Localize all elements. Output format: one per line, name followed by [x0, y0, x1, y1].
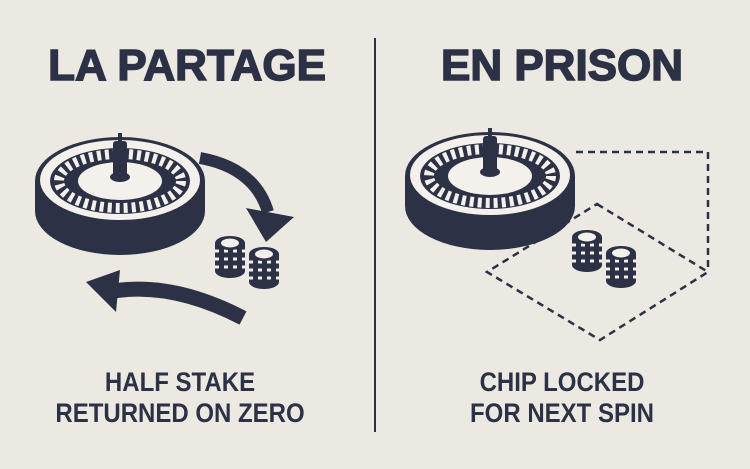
caption left: [55, 368, 305, 429]
arrow: bottom curved: [86, 270, 243, 318]
icon: chips right: [572, 230, 636, 288]
dashed prison area: [487, 152, 708, 340]
title: la partage: LA PARTAGE: [48, 41, 326, 90]
title: en prison: EN PRISON: [441, 41, 683, 90]
caption right: CHIP LOCKED: [480, 368, 644, 397]
arrow: top curved: [200, 158, 294, 242]
caption right: FOR NEXT SPIN: [470, 399, 654, 429]
icon: roulette wheel left: [35, 133, 205, 255]
caption left: RETURNED ON ZERO: [55, 399, 305, 429]
caption left: HALF STAKE: [105, 368, 255, 397]
caption right: [470, 368, 654, 429]
icon: chips left: [215, 236, 279, 289]
icon: roulette wheel right: [405, 128, 575, 250]
